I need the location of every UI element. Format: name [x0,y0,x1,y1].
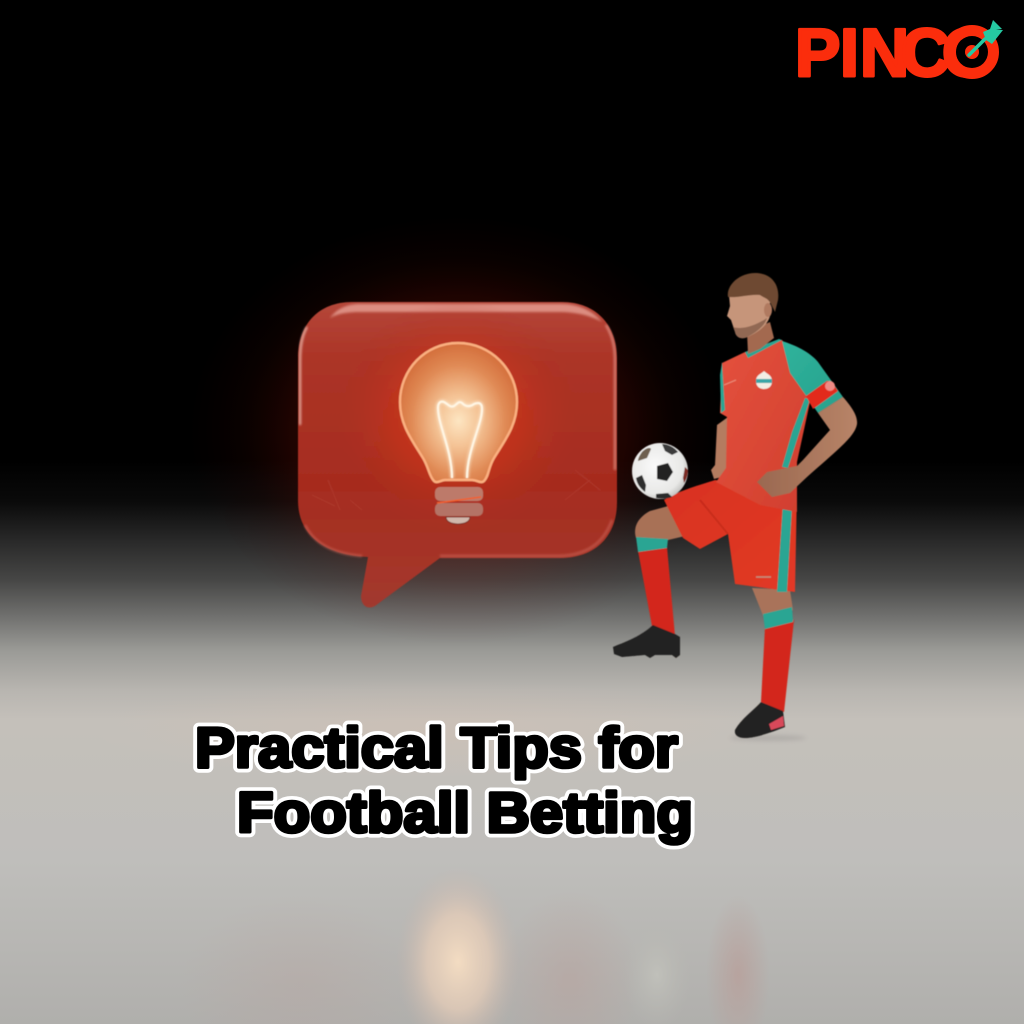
left arm [711,417,728,479]
bubble body [298,302,617,608]
logo wordmark: PINCO [795,15,995,91]
raised sock [638,547,675,636]
title text: Practical Tips for [195,716,678,780]
ear [764,303,772,317]
footballer [613,273,857,738]
football [632,443,688,499]
standing boot [735,702,785,738]
right arm [757,397,857,497]
title outline: Practical Tips for [195,716,678,780]
jersey sleeve [782,341,843,413]
bulb glass [400,343,517,482]
title outline [195,716,693,845]
scratches [312,470,600,510]
neck [747,322,774,354]
screw base [435,487,483,524]
title text: Football Betting [237,781,693,845]
speech bubble with light bulb [298,300,617,608]
beard [733,318,767,338]
title [195,716,693,845]
bulb glow [338,300,578,530]
jersey side stripe [782,398,810,468]
hair [728,273,778,312]
raised thigh skin [635,505,698,540]
logo target and arrow [950,20,1003,74]
floor shadow under boot [730,735,806,741]
raised boot [613,625,680,658]
jersey [716,339,843,512]
standing sock [761,620,794,712]
raised sock band [636,537,668,552]
face [727,293,770,338]
standing leg skin [752,588,793,618]
crest [756,371,772,389]
bubble rim highlight [330,304,602,322]
standing sock band [763,607,793,629]
title text [195,716,693,845]
armband [806,381,838,409]
logo: PINCO [795,15,1003,91]
title outline: Football Betting [237,781,693,845]
jersey collar [745,339,782,358]
shorts [664,480,797,592]
filament [438,402,482,478]
